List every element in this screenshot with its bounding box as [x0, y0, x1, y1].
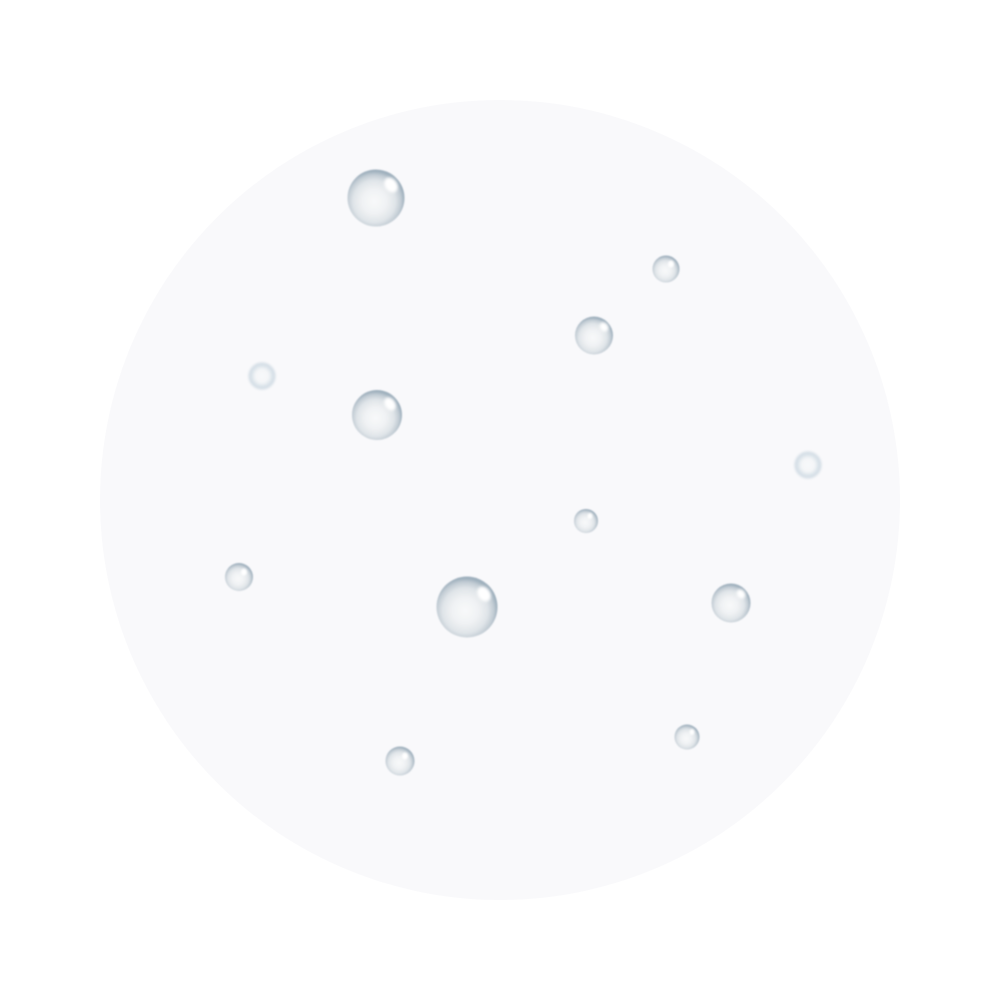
droplet 3: [352, 390, 402, 440]
droplet 6: [652, 256, 680, 282]
droplet 4: [575, 316, 613, 354]
droplet 11 (soft focus): [248, 362, 276, 390]
droplet 8: [386, 746, 414, 776]
pale disc background: [100, 100, 900, 900]
droplet 2: [436, 576, 498, 638]
droplet 1: [348, 170, 404, 226]
droplet 9: [674, 724, 700, 750]
droplet 10: [574, 509, 598, 533]
droplet 12 (soft focus): [794, 452, 822, 478]
droplet 7: [225, 563, 253, 591]
droplet 5: [712, 584, 750, 622]
